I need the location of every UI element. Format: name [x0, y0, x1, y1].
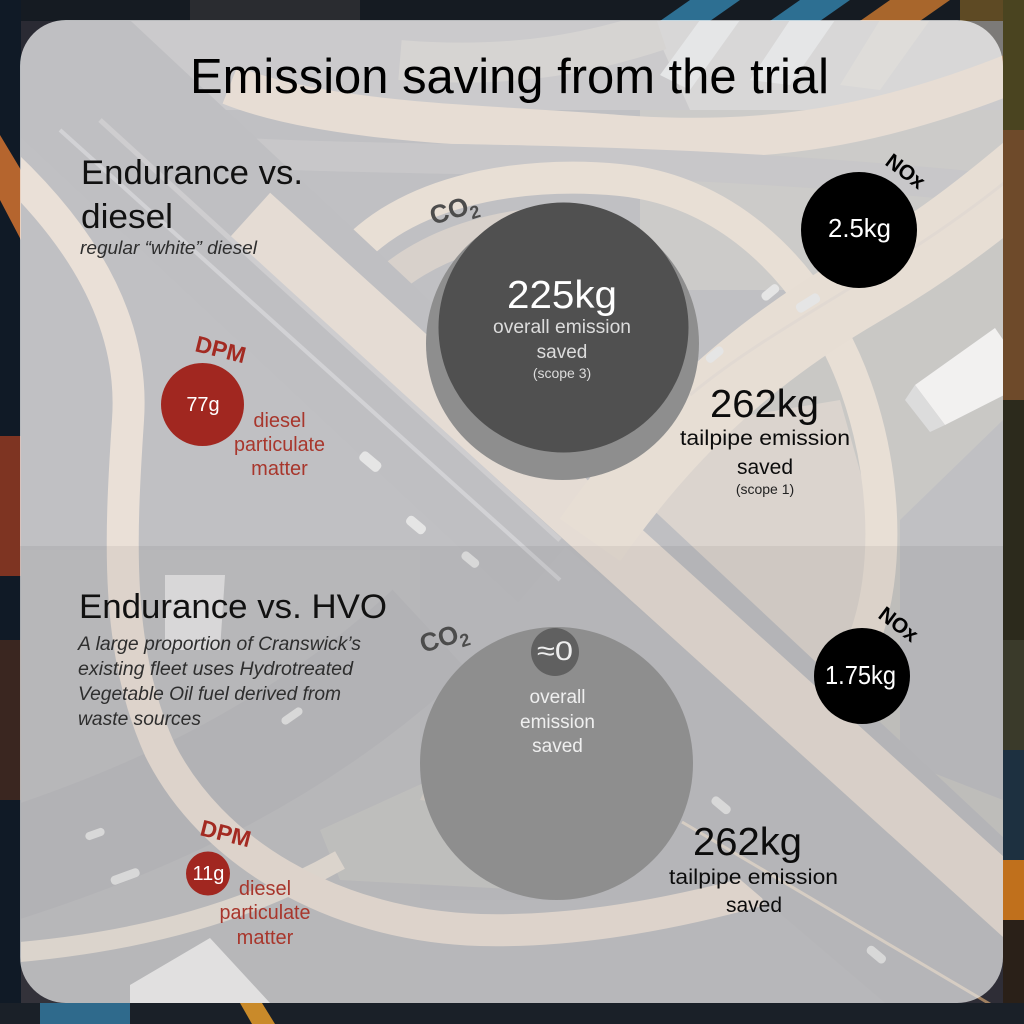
- callout: 262kg tailpipe: 262kg: [710, 383, 819, 426]
- text: diesel particulate matter: matter: [251, 458, 308, 480]
- label: CO2: 2: [467, 201, 483, 223]
- bubble: CO2 overall inner circle with text: overall emission: [493, 317, 631, 338]
- bubble: CO2 overall inner circle with text: (scope 3): [533, 365, 591, 381]
- bubble: CO2 overall inner circle with text: [438, 202, 688, 452]
- subheading: regular white diesel: regular “white” diesel: [80, 237, 258, 258]
- callout: 262kg tailpipe: (scope 1): [736, 481, 794, 497]
- text: diesel particulate matter: diesel: [253, 410, 306, 432]
- upper ring road: [335, 178, 881, 765]
- text: diesel particulate matter: [220, 878, 310, 949]
- text: overall emission saved: [520, 687, 595, 757]
- bubble: CO2 overall inner circle with text: 225kg: [507, 274, 617, 317]
- bubble: CO2 tailpipe outer circle: [426, 207, 699, 480]
- heading: Endurance vs. diesel: diesel: [81, 198, 173, 236]
- bubble: DPM 11g: [186, 852, 230, 896]
- wedge areas centre right: [620, 400, 885, 750]
- section: Endurance vs. diesel: [80, 150, 930, 497]
- bubble: approx zero overall: [531, 628, 579, 676]
- callout: 262kg tailpipe: tailpipe emission: [680, 427, 850, 450]
- text: diesel particulate matter: particulate: [234, 434, 325, 456]
- section: Endurance vs. HVO: [77, 588, 923, 949]
- text: diesel particulate matter: particulate: [220, 902, 310, 924]
- bubble: DPM 77g: [161, 363, 244, 446]
- left ring road: [0, 150, 760, 930]
- heading: Endurance vs. HVO: Endurance vs. HVO: [79, 588, 387, 626]
- cars: [84, 283, 888, 965]
- bubble: NOx 1.75kg: 1.75kg: [825, 660, 896, 690]
- description paragraph: A large proportion of Cranswick’s: [77, 634, 361, 655]
- text: overall emission saved: emission: [520, 712, 595, 733]
- beige top road: [230, 62, 1024, 138]
- concrete median: [250, 215, 1024, 930]
- label: CO2: CO: [426, 191, 472, 231]
- callout: 262kg tailpipe: saved: [726, 894, 782, 917]
- bubble: NOx 2.5kg: 2.5kg: [828, 213, 891, 243]
- text: overall emission saved: saved: [532, 736, 583, 757]
- callout: 262kg tailpipe: [669, 821, 838, 917]
- bubble: CO2 tailpipe circle: [420, 627, 693, 900]
- callout: 262kg tailpipe: saved: [737, 456, 793, 479]
- text: diesel particulate matter: diesel: [239, 878, 291, 900]
- bubble: DPM 11g: 11g: [193, 863, 224, 885]
- right diagonal road: [590, 160, 1024, 540]
- text: diesel particulate matter: matter: [237, 927, 294, 949]
- right side ground: [640, 110, 1003, 290]
- title: Emission saving from the trial: [190, 50, 829, 104]
- heading: Endurance vs. diesel: Endurance vs.: [81, 154, 303, 192]
- label: CO2: CO: [416, 619, 462, 659]
- callout: 262kg tailpipe: [680, 383, 850, 497]
- lower section tint: [20, 546, 1003, 1003]
- callout: 262kg tailpipe: 262kg: [693, 821, 802, 864]
- description paragraph: [77, 634, 361, 730]
- building white lower left: [165, 575, 225, 650]
- outer edge colours: [0, 0, 1024, 21]
- white building bottom: [130, 938, 270, 1003]
- bubble: DPM 77g: 77g: [186, 394, 220, 416]
- lower carriageway: [520, 600, 1024, 1024]
- lower left feeder lanes: [0, 630, 430, 880]
- top zone (pale grey ground): [20, 20, 1003, 110]
- bottom ground: [420, 900, 1003, 1003]
- label: CO2: 2: [457, 629, 473, 651]
- label: DPM: DPM: [198, 815, 254, 852]
- bubble: CO2 overall inner circle with text: saved: [537, 342, 587, 363]
- white building right: [915, 328, 1024, 425]
- description paragraph: existing fleet uses Hydrotreated: [78, 659, 354, 680]
- callout: 262kg tailpipe: tailpipe emission: [669, 866, 838, 889]
- dark ground left and centre: [20, 110, 420, 550]
- bubble: NOx 2.5kg: [801, 172, 917, 288]
- bubble: approx zero overall: ≈0: [537, 636, 573, 666]
- text: diesel particulate matter: [234, 410, 325, 480]
- label: DPM: DPM: [193, 331, 249, 368]
- description paragraph: waste sources: [78, 709, 201, 730]
- description paragraph: Vegetable Oil fuel derived from: [78, 684, 341, 705]
- bubble: NOx 1.75kg: [814, 628, 910, 724]
- label: NOx: NOx: [874, 603, 923, 647]
- text: overall emission saved: overall: [530, 687, 585, 708]
- heading: Endurance vs. diesel: [81, 154, 303, 236]
- label: NOx: NOx: [881, 150, 930, 194]
